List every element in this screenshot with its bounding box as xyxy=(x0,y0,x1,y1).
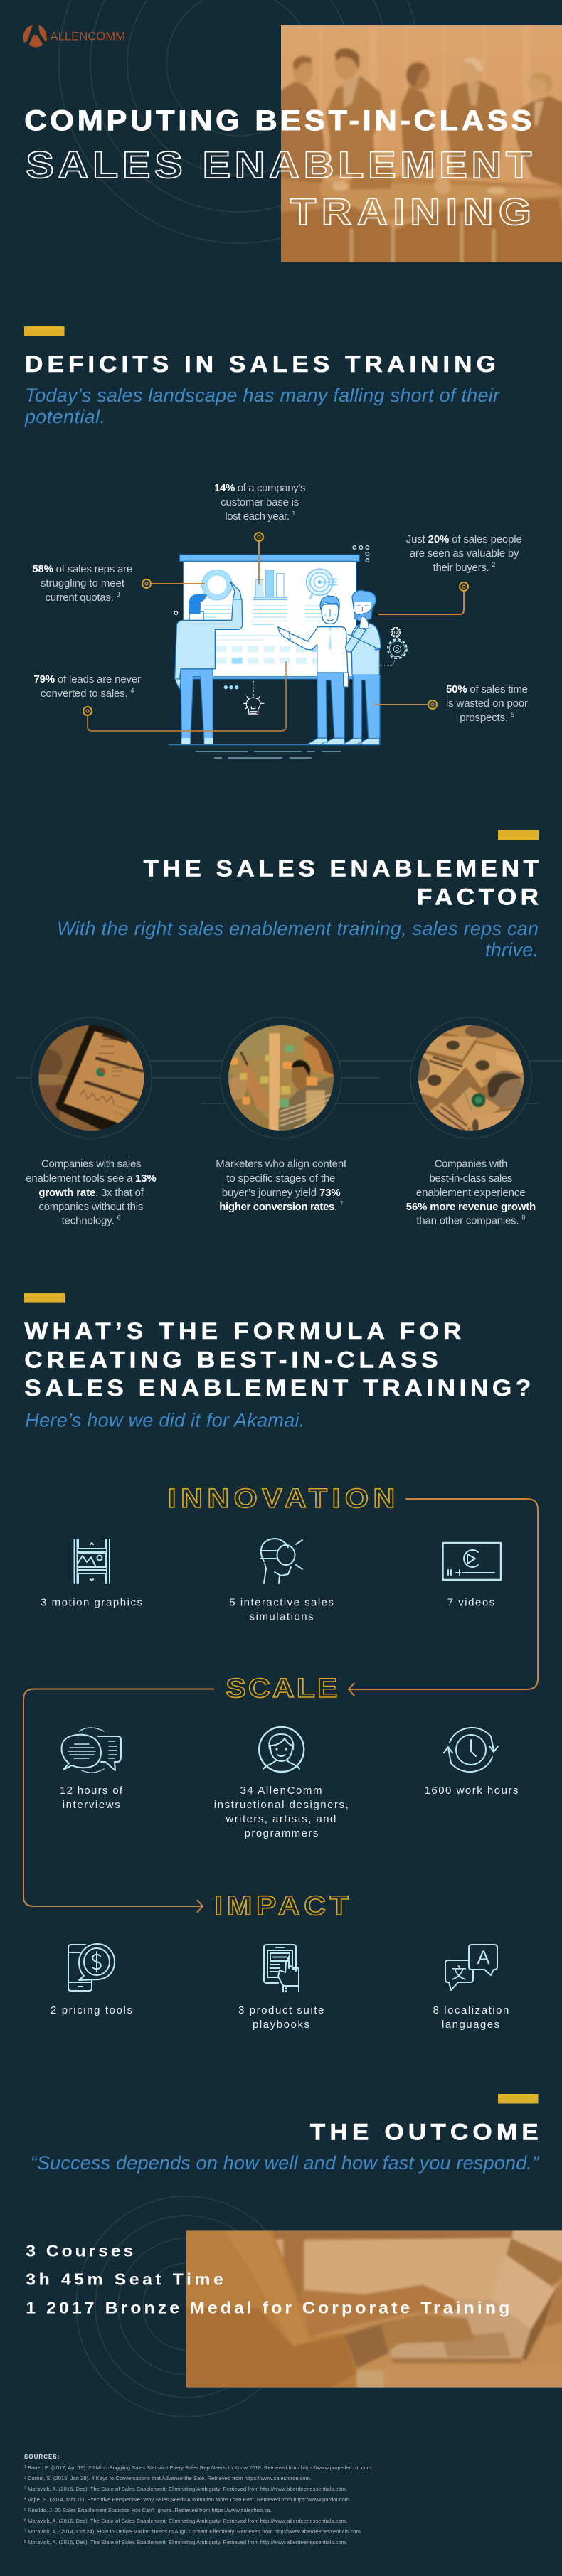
sources: Vajre, S. (2014, Mar 11). Executive Perspective: Why Sales Needs Automation More Than Ever. Retrieved from https://www.pardot.com. xyxy=(26,2496,351,2503)
text: marketers conversion: to specific stages of the xyxy=(226,1172,335,1185)
caption: interviews: interviews xyxy=(63,1799,120,1811)
figure: middle presenter pointing xyxy=(278,596,348,744)
outcome stats: 3 Courses xyxy=(26,2242,133,2260)
icon: gears xyxy=(380,628,407,666)
text: marketers conversion: Marketers who align content xyxy=(216,1158,347,1170)
caption: AllenComm team: programmers xyxy=(245,1827,318,1839)
icon: VR headset head xyxy=(260,1539,302,1583)
callout: 79%: 79% of leads are never xyxy=(33,673,141,685)
caption: playbooks: 3 product suite xyxy=(238,2004,324,2016)
callout: 14%: customer base is xyxy=(221,496,299,508)
text: revenue growth: enablement experience xyxy=(416,1187,526,1199)
caption: simulations: 5 interactive sales xyxy=(229,1597,334,1608)
heading: deficits: DEFICITS IN SALES TRAINING xyxy=(25,352,496,378)
icon: person in circle xyxy=(259,1727,304,1772)
callout: 79%: 4 xyxy=(130,687,134,694)
caption: languages: 8 localization xyxy=(433,2004,509,2016)
sources: Moravick, A. (2014, Oct 24). How to Define Market Needs to Align Content Effectively. Retrieved from http://www.aberdeenessentials.com. xyxy=(26,2528,362,2535)
sources: Cornel, S. (2016, Jan 28). 4 Keys to Conversations that Advance the Sale. Retrieved from https://www.salesforce.com. xyxy=(26,2475,312,2481)
heading: sales enablement factor: FACTOR xyxy=(417,885,539,910)
sources: 2 xyxy=(24,2476,26,2480)
text: revenue growth: 56% more revenue growth xyxy=(406,1201,536,1213)
outcome stats: 3h 45m Seat Time xyxy=(26,2271,223,2289)
caption: videos: 7 videos xyxy=(447,1597,494,1608)
caption: interviews: 12 hours of xyxy=(60,1785,123,1797)
callout: 20%: Just 20% of sales people xyxy=(406,533,522,545)
arrow: scale to impact xyxy=(23,1689,214,1913)
caption: playbooks: playbooks xyxy=(253,2019,309,2031)
photo: business people meeting xyxy=(281,25,562,262)
text: tools growth rate: 6 xyxy=(117,1214,121,1222)
heading: sales enablement factor: THE SALES ENABLEMENT xyxy=(144,857,539,882)
outcome stats xyxy=(26,2242,509,2317)
text: tools growth rate xyxy=(26,1158,157,1227)
sources: Rinaldo, J. 20 Sales Enablement Statistics You Can’t Ignore. Retrieved from https://www.saleshub.ca. xyxy=(26,2507,272,2513)
circle photo: team with sticky notes xyxy=(221,1017,341,1138)
figure: left presenter xyxy=(175,581,243,744)
title xyxy=(24,104,531,233)
callout: 79%: converted to sales. xyxy=(41,688,128,700)
text: marketers conversion: buyer’s journey yield 73% xyxy=(222,1187,341,1199)
heading: formula: SALES ENABLEMENT TRAINING? xyxy=(24,1376,531,1401)
title: COMPUTING BEST-IN-CLASS xyxy=(24,104,531,137)
accent bar xyxy=(498,830,539,840)
subtitle: deficits: Today’s sales landscape has many falling short of their xyxy=(25,385,500,406)
caption: languages xyxy=(433,2004,509,2031)
icon: translation speech bubbles: A xyxy=(477,1947,490,1968)
callout: 20%: their buyers. xyxy=(433,562,489,574)
subtitle: factor: With the right sales enablement training, sales reps can xyxy=(57,918,539,939)
accent bar xyxy=(24,1293,65,1303)
icon: clock with arrows xyxy=(444,1728,498,1772)
text: marketers conversion xyxy=(216,1158,347,1213)
title: SALES ENABLEMENT xyxy=(26,144,531,186)
callout: 14%: 14% of a company’s xyxy=(214,482,306,494)
text: revenue growth: best-in-class sales xyxy=(430,1172,512,1185)
text: marketers conversion: higher conversion rates. xyxy=(219,1201,337,1213)
caption: work hours: 1600 work hours xyxy=(424,1785,518,1797)
text: tools growth rate: companies without this xyxy=(38,1201,143,1213)
icon: video player xyxy=(442,1543,501,1580)
callout: 14% xyxy=(214,482,306,584)
title: TRAINING xyxy=(290,191,531,233)
sources: Moravick, A. (2016, Dec). The State of Sales Enablement: Eliminating Ambiguity. Retrieved from http://www.aberdeenessentials.com. xyxy=(26,2518,347,2524)
callout: 20%: are seen as valuable by xyxy=(410,547,519,560)
callout: 14%: lost each year. xyxy=(225,511,290,523)
icon: translation speech bubbles: 文 xyxy=(451,1965,467,1982)
sources: SOURCES: xyxy=(24,2454,59,2460)
caption: AllenComm team: instructional designers, xyxy=(214,1799,349,1811)
heading: outcome: THE OUTCOME xyxy=(310,2120,539,2145)
concentric rings: header background xyxy=(59,0,419,243)
text: revenue growth xyxy=(406,1158,536,1227)
text: tools growth rate: technology. xyxy=(62,1214,115,1227)
heading: sales enablement factor xyxy=(144,857,539,910)
figure: right man thinking xyxy=(343,590,381,744)
callout: 50%: 5 xyxy=(511,711,514,718)
callout: 58%: current quotas. xyxy=(46,592,114,604)
subtitle: factor xyxy=(57,918,539,961)
caption: motion graphics: 3 motion graphics xyxy=(41,1597,142,1608)
circle photo: tablet with charts xyxy=(25,1017,159,1140)
sources: 6 xyxy=(24,2518,26,2523)
sources xyxy=(24,2454,373,2545)
logo: AllenComm: ALLENCOMM xyxy=(50,30,125,43)
heading: formula xyxy=(24,1319,531,1401)
logo: AllenComm xyxy=(23,25,125,47)
text: tools growth rate: Companies with sales xyxy=(41,1158,141,1170)
callout: 79% xyxy=(33,661,286,731)
concentric rings: outcome background xyxy=(76,2196,297,2417)
caption: pricing tools: 2 pricing tools xyxy=(51,2004,132,2016)
callout: 58% xyxy=(32,563,205,604)
caption: AllenComm team: 34 AllenComm xyxy=(240,1785,322,1797)
callout: 58%: 3 xyxy=(116,591,120,598)
sources: 8 xyxy=(24,2540,26,2544)
text: revenue growth: than other companies. xyxy=(416,1214,519,1227)
sources: 5 xyxy=(24,2508,26,2512)
callout: 58%: 58% of sales reps are xyxy=(32,563,132,575)
callout: 20% xyxy=(378,533,522,614)
callout: 50%: is wasted on poor xyxy=(446,698,528,710)
photo: hands typing on laptop xyxy=(186,2230,562,2388)
icon: light bulb xyxy=(243,681,264,715)
caption: simulations xyxy=(229,1597,334,1623)
sources: 1 xyxy=(24,2465,26,2469)
caption: interviews xyxy=(60,1785,123,1811)
text: tools growth rate: growth rate, 3x that of xyxy=(38,1187,144,1199)
callout: 50%: prospects. xyxy=(460,712,508,724)
text: marketers conversion: 7 xyxy=(340,1200,344,1207)
accent bar xyxy=(24,326,64,336)
ground and dashes xyxy=(169,745,378,758)
sources: Bauer, E. (2017, Apr 19). 20 Mind-Boggling Sales Statistics Every Sales Rep Needs to Know 2018. Retrieved from https://www.propellercrm.com. xyxy=(26,2464,373,2471)
callout: 14%: 1 xyxy=(292,510,295,517)
callout: 58%: struggling to meet xyxy=(41,577,125,589)
heading: formula: WHAT’S THE FORMULA FOR xyxy=(24,1319,461,1345)
caption: AllenComm team: writers, artists, and xyxy=(225,1813,336,1825)
decorative dots xyxy=(174,546,369,689)
icon: phone with dollar xyxy=(68,1944,115,1991)
text: revenue growth: Companies with xyxy=(435,1158,507,1170)
icon: translation speech bubbles xyxy=(445,1945,497,1990)
circle photo: pile of money xyxy=(410,1017,531,1138)
caption: languages: languages xyxy=(442,2019,499,2031)
callout: 20%: 2 xyxy=(492,561,495,568)
icon: interview speech bubbles xyxy=(62,1728,121,1773)
quote: outcome: “Success depends on how well and how fast you respond.” xyxy=(31,2152,539,2174)
illustration: team at presentation board xyxy=(169,546,407,758)
heading: impact: IMPACT xyxy=(214,1890,349,1920)
sources: 4 xyxy=(24,2497,26,2501)
sources: Moravick, A. (2016, Dec). The State of Sales Enablement: Eliminating Ambiguity. Retrieved from http://www.aberdeenessentials.com. xyxy=(26,2486,347,2492)
accent bar xyxy=(498,2094,538,2103)
sources: 7 xyxy=(24,2529,26,2533)
icon: motion graphics film strip xyxy=(74,1539,110,1583)
sources: 3 xyxy=(24,2486,26,2491)
icon: tablet with tapping hand xyxy=(264,1945,299,1992)
sources: Moravick, A. (2016, Dec). The State of Sales Enablement: Eliminating Ambiguity. Retrieved from http://www.aberdeenessentials.com. xyxy=(26,2539,347,2545)
subtitle: formula: Here’s how we did it for Akamai. xyxy=(25,1410,304,1431)
connecting lines behind circles xyxy=(16,1061,562,1103)
text: tools growth rate: enablement tools see a 13% xyxy=(26,1172,157,1185)
callout: 50%: 50% of sales time xyxy=(446,683,528,695)
subtitle: factor: thrive. xyxy=(485,939,539,961)
caption: AllenComm team xyxy=(214,1785,349,1839)
callout: 50% xyxy=(374,683,528,724)
heading: formula: CREATING BEST-IN-CLASS xyxy=(24,1348,438,1373)
caption: simulations: simulations xyxy=(250,1610,314,1623)
heading: scale: SCALE xyxy=(226,1672,337,1703)
outcome stats: 1 2017 Bronze Medal for Corporate Training xyxy=(26,2299,509,2317)
subtitle: deficits xyxy=(24,385,500,427)
subtitle: deficits: potential. xyxy=(24,406,105,427)
arrow: innovation to scale xyxy=(349,1499,538,1696)
caption: playbooks xyxy=(238,2004,324,2031)
text: revenue growth: 8 xyxy=(521,1214,525,1222)
heading: innovation: INNOVATION xyxy=(168,1482,395,1513)
